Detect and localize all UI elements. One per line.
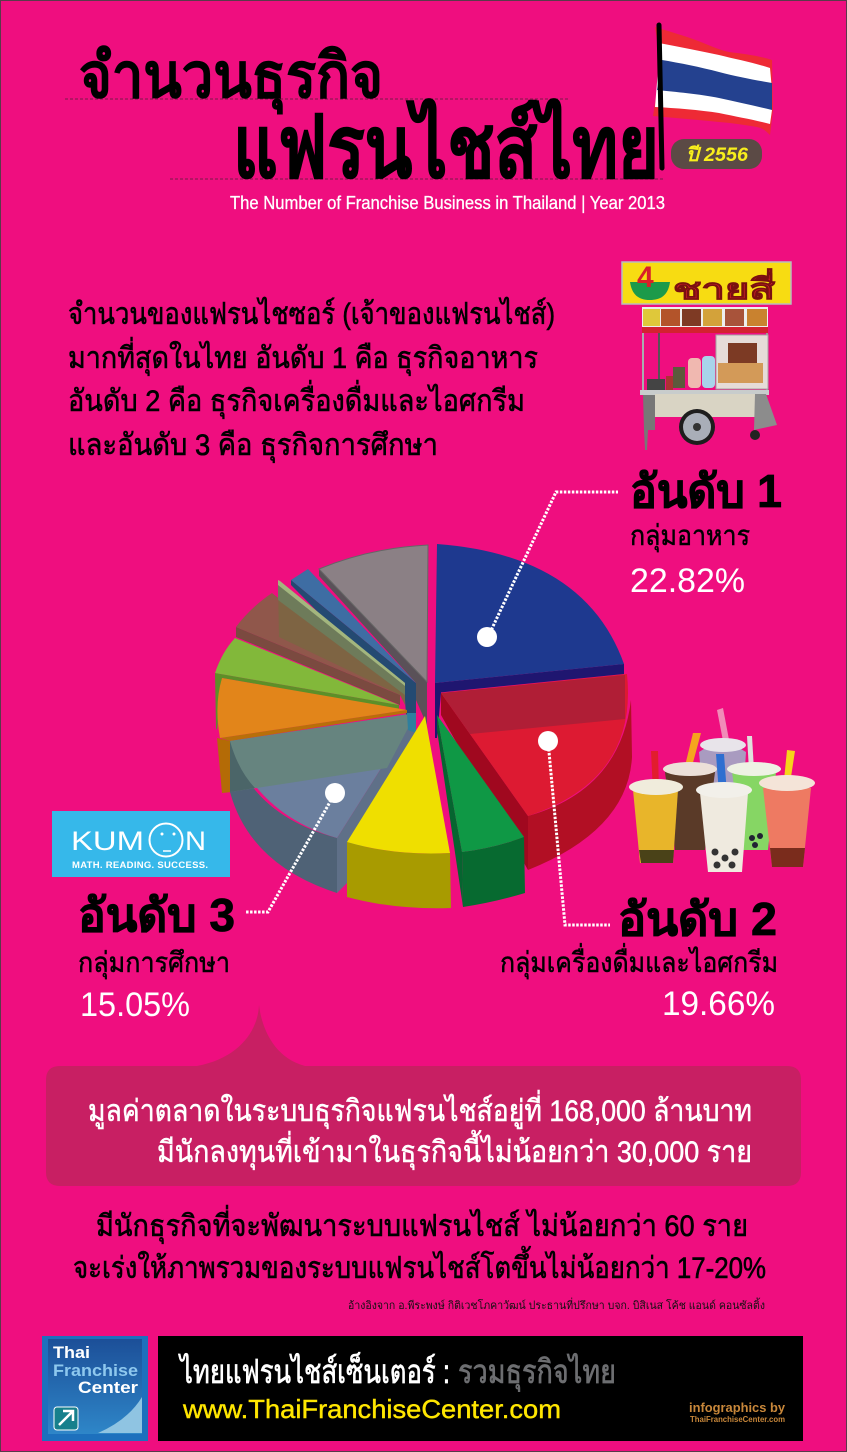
title [65,42,665,196]
logo: Thai Franchise Center: Franchise [53,1361,138,1380]
callout: market value [46,1005,801,1186]
label: rank 1: กลุ่มอาหาร [630,520,750,553]
image: street food cart: 4 [637,261,654,294]
slice: food, rank 1 [435,544,624,738]
image: street food cart [622,261,791,450]
footer banner: ไทยแฟรนไชส์เซ็นเตอร์ : [178,1352,450,1390]
footer banner: infographics by [689,1400,786,1415]
slice: small blue [291,569,416,733]
logo: Thai Franchise Center: Thai [53,1343,90,1362]
logo: Thai Franchise Center: Center [78,1378,138,1397]
text: source: อ้างอิงจาก อ.พีระพงษ์ กิติเวชโภคาวัฒน์ ประธานที่ปรึกษา บจก. บิสิเนส โค้ช แอนด์ คอนซัลติ้ง [348,1297,765,1312]
label: rank 3: กลุ่มการศึกษา [78,947,230,980]
badge: year [671,139,762,169]
slice: olive [278,580,405,705]
icon: Thai flag [653,25,773,168]
logo: Thai Franchise Center [42,1336,148,1441]
slice: education, rank 3 [230,713,416,893]
label: rank 1: อันดับ 1 [630,465,782,517]
intro text: มากที่สุดในไทย อันดับ 1 คือ ธุรกิจอาหาร [68,337,538,377]
slice: gray [319,545,428,725]
text: forecast: มีนักธุรกิจที่จะพัฒนาระบบแฟรนไชส์ ไม่น้อยกว่า 60 ราย [96,1205,748,1245]
logo: Kumon: KUM [71,826,144,856]
slice: light green [215,638,399,730]
slice: orange [217,678,407,793]
slice: green [437,715,525,907]
slice: brown [236,593,400,705]
leader line: rank 3 [245,783,345,912]
label: rank 3: 15.05% [80,986,190,1024]
label: rank 2: กลุ่มเครื่องดื่มและไอศกรีม [500,943,778,980]
logo: Kumon: N [185,826,206,856]
badge: year: ปี 2556 [686,144,748,166]
logo: Kumon: MATH. READING. SUCCESS. [72,860,208,871]
pie chart [215,544,632,908]
label: rank 2: อันดับ 2 [618,893,777,945]
label: rank 2 [500,893,778,1023]
footer banner: ThaiFranchiseCenter.com [690,1415,785,1424]
label: rank 3 [78,889,235,1024]
title: จำนวนธุรกิจ [79,42,383,113]
footer banner: www.ThaiFranchiseCenter.com [182,1394,561,1424]
leader line: rank 1 [477,492,618,647]
logo: Kumon [52,811,230,877]
slice: yellow [347,716,451,908]
label: rank 1: 22.82% [630,562,745,600]
title: แฟรนไชส์ไทย [233,100,659,196]
intro text: จำนวนของแฟรนไชซอร์ (เจ้าของแฟรนไชส์) [68,296,555,331]
image: street food cart: ชายสี่ [673,268,775,306]
callout: market value: มีนักลงทุนที่เข้ามาในธุรกิจนี้ไม่น้อยกว่า 30,000 ราย [157,1130,752,1171]
slice: drinks, rank 2 [441,674,632,870]
callout: market value: มูลค่าตลาดในระบบธุรกิจแฟรนไชส์อยู่ที่ 168,000 ล้านบาท [88,1090,752,1130]
leader line: rank 2 [538,731,610,925]
footer banner [158,1336,803,1441]
label: rank 2: 19.66% [662,985,775,1023]
label: rank 3: อันดับ 3 [78,889,235,941]
footer banner: รวมธุรกิจไทย [458,1353,616,1392]
intro text: และอันดับ 3 คือ ธุรกิจการศึกษา [68,429,438,464]
intro text [68,296,555,464]
image: bubble tea cups [629,708,815,872]
label: rank 1 [630,465,782,600]
intro text: อันดับ 2 คือ ธุรกิจเครื่องดื่มและไอศกรีม [68,380,525,420]
subtitle: The Number of Franchise Business in Thailand | Year 2013 [230,193,665,213]
text: forecast [73,1205,766,1285]
